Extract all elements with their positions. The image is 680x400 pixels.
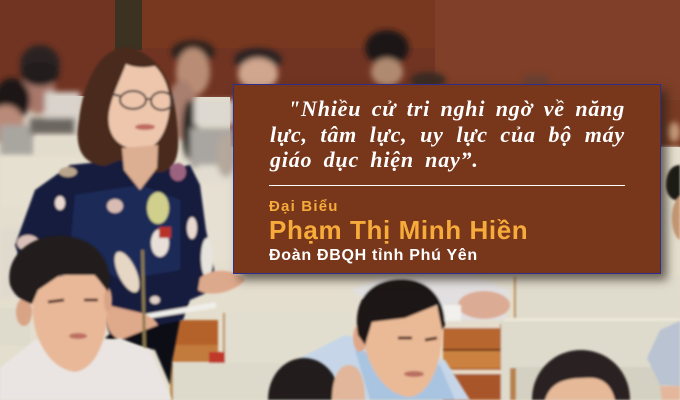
speaker title: Đại Biểu bbox=[269, 198, 339, 215]
quote text: giáo dục hiện nay”. bbox=[270, 147, 479, 172]
speaker name: Phạm Thị Minh Hiền bbox=[269, 215, 528, 245]
floral blouse bbox=[15, 160, 218, 335]
mid row seats bbox=[0, 136, 680, 298]
notepad bbox=[145, 302, 216, 318]
divider bbox=[269, 185, 625, 186]
plaid shirt at right edge bbox=[647, 321, 680, 400]
glasses bbox=[112, 91, 173, 110]
red delegate badge bbox=[159, 227, 171, 238]
quote panel bbox=[233, 84, 661, 274]
right-edge seated person bbox=[666, 165, 680, 240]
seated man, front centre bbox=[300, 272, 510, 400]
speaking delegate: woman standing bbox=[15, 47, 245, 385]
neck bbox=[122, 145, 158, 190]
delegation: Đoàn ĐBQH tỉnh Phú Yên bbox=[269, 247, 478, 264]
hands bbox=[198, 271, 245, 294]
partial heads along the bottom edge bbox=[268, 350, 630, 400]
seated man, front left bbox=[0, 236, 172, 400]
blouse flowers bbox=[17, 163, 213, 304]
face bbox=[109, 64, 170, 150]
microphone stand bbox=[141, 250, 146, 350]
quote text: "Nhiều cử tri nghi ngờ về năng bbox=[288, 96, 625, 121]
blurred audience in the back row bbox=[0, 30, 680, 183]
quote text: lực, tâm lực, uy lực của bộ máy bbox=[270, 122, 625, 147]
skirt bbox=[105, 320, 180, 385]
quote text bbox=[270, 96, 625, 172]
hair bbox=[78, 47, 178, 172]
seats and wood desks in the foreground bbox=[0, 277, 680, 400]
mouth bbox=[135, 124, 155, 130]
